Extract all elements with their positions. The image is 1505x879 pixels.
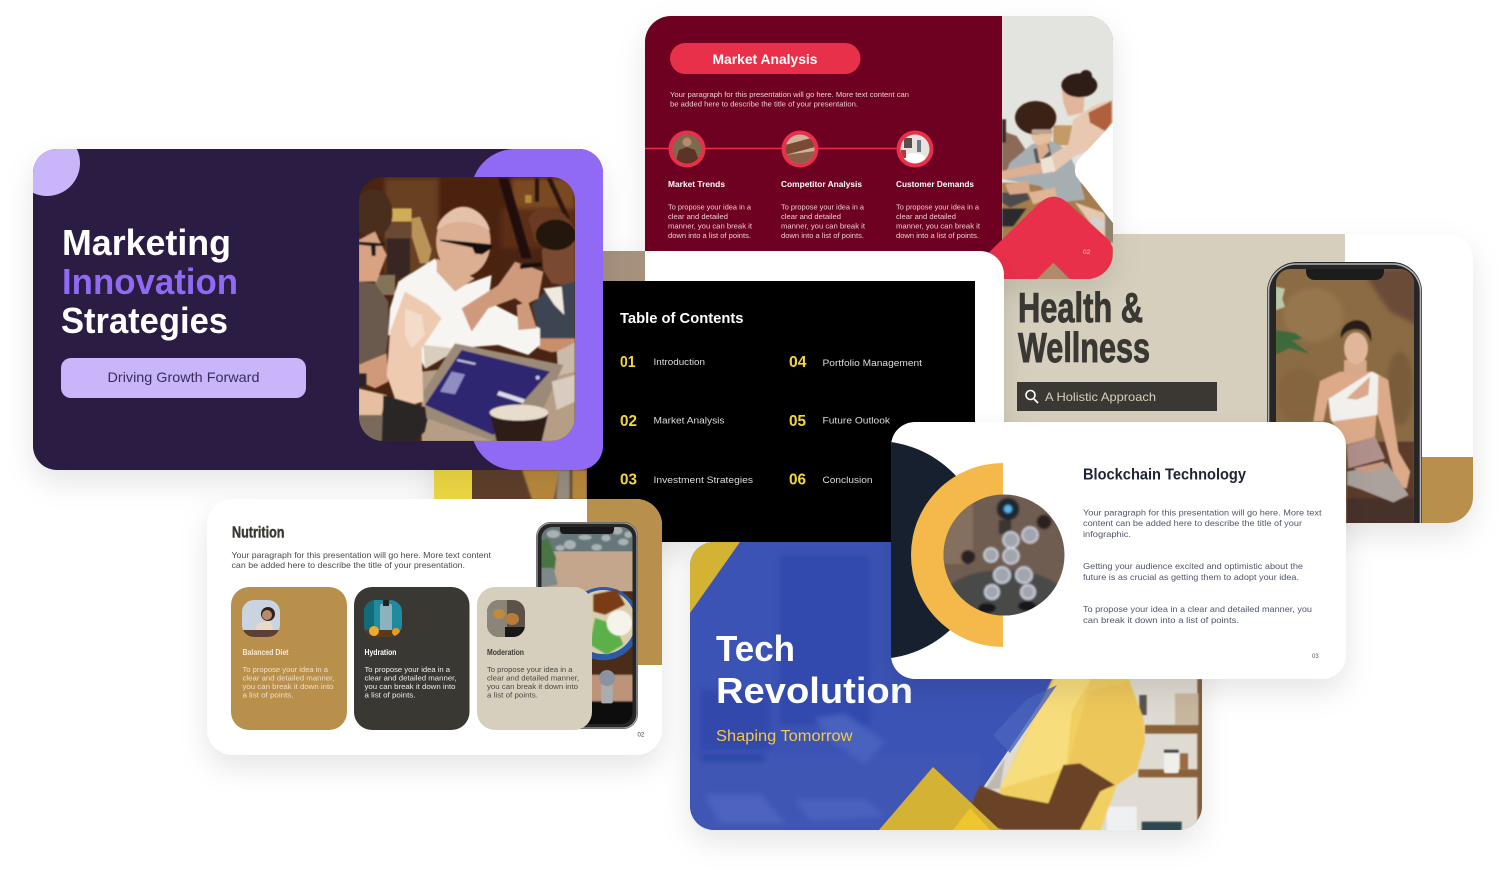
- card: moderation: [477, 587, 592, 730]
- column: customer demands: manner, you can break it: [896, 224, 980, 230]
- timeline with photo circles: [645, 130, 934, 168]
- card: balanced diet: Balanced Diet: [242, 648, 289, 657]
- column: market trends: Market Trends: [668, 180, 726, 189]
- card: moderation: Moderation: [487, 648, 524, 657]
- heading: health and wellness: Wellness: [1018, 324, 1150, 371]
- column: competitor analysis: To propose your idea in a: [781, 204, 864, 212]
- card: balanced diet: To propose your idea in a: [242, 667, 328, 674]
- panel: tech revolution slide: [690, 542, 1213, 835]
- column: competitor analysis: down into a list of points.: [781, 233, 864, 240]
- decorative red chevron: [977, 197, 1112, 279]
- card: hydration: you can break it down into: [364, 684, 456, 691]
- paragraphs: To propose your idea in a clear and detailed manner, you: [1083, 604, 1312, 614]
- lighter blue band beside diagonal: [993, 685, 1057, 753]
- column: competitor analysis: Competitor Analysis: [781, 180, 863, 189]
- column: market trends: clear and detailed: [668, 214, 728, 221]
- photo: colleagues with tablet: [354, 175, 582, 445]
- paragraphs: Getting your audience excited and optimistic about the: [1083, 561, 1303, 571]
- subtitle pill: [61, 358, 306, 398]
- column: customer demands: clear and detailed: [896, 214, 956, 221]
- card: balanced diet: you can break it down into: [242, 684, 334, 691]
- card: hydration: Hydration: [364, 648, 397, 657]
- pill heading: market analysis: [670, 43, 860, 74]
- decorative corner circle: [33, 149, 80, 196]
- photo: person in yellow shirt: [970, 679, 1202, 830]
- card: balanced diet: clear and detailed manner,: [242, 676, 335, 682]
- contents list: 02: [620, 413, 637, 430]
- search bar: A Holistic Approach: [1045, 390, 1156, 404]
- contents list: Market Analysis: [654, 416, 725, 426]
- card: moderation: a list of points.: [487, 692, 538, 700]
- phone: food bowl: [536, 522, 640, 729]
- intro paragraph: be added here to describe the title of your presentation.: [670, 100, 858, 108]
- photo: team around laptop: [1002, 16, 1115, 283]
- heading: health and wellness: Health &: [1018, 284, 1143, 331]
- subtitle: Shaping Tomorrow: [716, 728, 853, 745]
- photo: robot: [944, 494, 1064, 616]
- contents list: 04: [789, 354, 807, 371]
- column: market trends: manner, you can break it: [668, 224, 752, 230]
- contents list: 06: [789, 472, 806, 488]
- card: balanced diet: [231, 587, 347, 730]
- title: Innovation: [62, 261, 238, 302]
- thumbnail: burgers: [487, 600, 525, 637]
- card: moderation: you can break it down into: [487, 684, 578, 691]
- title: Strategies: [61, 300, 228, 341]
- contents list: Introduction: [654, 357, 705, 367]
- subtitle pill: Driving Growth Forward: [108, 369, 260, 385]
- contents list: Future Outlook: [822, 416, 891, 426]
- panel: market analysis slide: [645, 16, 1115, 283]
- contents list: Portfolio Management: [822, 358, 923, 368]
- title: [716, 628, 913, 711]
- column: competitor analysis: clear and detailed: [781, 214, 841, 221]
- contents list: Investment Strategies: [654, 475, 754, 485]
- panel: health and wellness slide: [960, 234, 1482, 527]
- contents list: [620, 354, 923, 488]
- pill heading: market analysis: Market Analysis: [712, 52, 818, 67]
- page number: 02: [1083, 249, 1091, 256]
- column: competitor analysis: [781, 180, 865, 240]
- title: Tech: [716, 628, 795, 669]
- page number: 03: [1312, 654, 1319, 660]
- paragraphs: infographic.: [1083, 529, 1131, 539]
- yellow triangles: [690, 542, 740, 613]
- panel: table of contents slide: [434, 251, 1004, 542]
- intro paragraph: Your paragraph for this presentation will go here. More text content: [232, 551, 492, 560]
- thumbnail: water bottle: [364, 600, 402, 637]
- decorative orange half ring: [911, 463, 1003, 647]
- intro paragraph: [670, 90, 909, 108]
- title: [61, 222, 238, 341]
- column: market trends: [668, 180, 752, 240]
- column: customer demands: down into a list of points.: [896, 233, 979, 240]
- decorative dark circle: [891, 442, 956, 658]
- intro paragraph: [232, 551, 492, 570]
- card: hydration: [354, 587, 470, 730]
- column: customer demands: Customer Demands: [896, 180, 975, 189]
- column: market trends: down into a list of points.: [668, 233, 751, 240]
- paragraphs: Your paragraph for this presentation will go here. More text: [1083, 508, 1322, 518]
- contents list: 05: [789, 413, 806, 430]
- column: market trends: To propose your idea in a: [668, 204, 751, 212]
- contents list: 03: [620, 472, 637, 488]
- card: balanced diet: a list of points.: [242, 692, 294, 700]
- search bar: [1017, 382, 1217, 411]
- heading: blockchain technology: Blockchain Technology: [1083, 466, 1246, 484]
- paragraphs: content can be added here to describe the title of your: [1083, 518, 1302, 528]
- contents list: Conclusion: [822, 475, 872, 485]
- panel: marketing innovation slide: [14, 130, 631, 470]
- paragraphs: [1083, 508, 1322, 625]
- title: Revolution: [716, 670, 913, 711]
- heading: table of contents: Table of Contents: [620, 310, 744, 327]
- intro paragraph: Your paragraph for this presentation will go here. More text content can: [670, 90, 909, 99]
- heading: nutrition: Nutrition: [232, 524, 284, 542]
- heading: health and wellness: [1018, 284, 1150, 371]
- paragraphs: future is as crucial as getting them to adopt your idea.: [1083, 572, 1299, 582]
- card: hydration: clear and detailed manner,: [364, 676, 457, 682]
- column: customer demands: [896, 180, 980, 240]
- card: moderation: clear and detailed manner,: [487, 676, 579, 682]
- contents list: 01: [620, 354, 636, 371]
- panel: nutrition slide: [207, 499, 667, 755]
- column: customer demands: To propose your idea in a: [896, 204, 979, 212]
- panel: blockchain technology slide: [890, 422, 1352, 698]
- phone: meditating woman: [1267, 262, 1422, 525]
- thumbnail: woman with food: [242, 600, 280, 637]
- card: moderation: To propose your idea in a: [487, 667, 573, 674]
- column: competitor analysis: manner, you can break it: [781, 224, 865, 230]
- page number: 02: [638, 732, 645, 738]
- intro paragraph: can be added here to describe the title of your presentation.: [232, 561, 465, 570]
- paragraphs: can break it down into a list of points.: [1083, 615, 1239, 625]
- title: Marketing: [62, 222, 231, 263]
- card: hydration: To propose your idea in a: [364, 667, 450, 674]
- card: hydration: a list of points.: [364, 692, 416, 700]
